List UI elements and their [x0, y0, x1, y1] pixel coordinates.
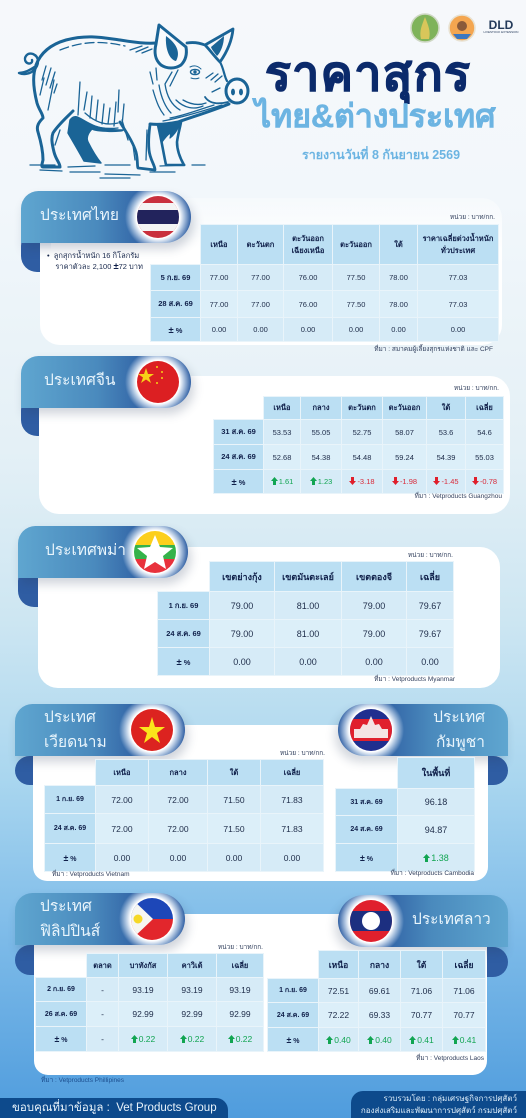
table: Laos prices: กลาง	[370, 960, 389, 970]
logo: DLD	[484, 18, 518, 34]
source: Cambodia: ที่มา : Vetproducts Cambodia	[391, 870, 474, 877]
table: Philippines prices: 26 ส.ค. 69	[45, 1010, 77, 1018]
table: Philippines prices: 92.99	[181, 1009, 203, 1019]
table: Vietnam prices: 72.00	[111, 824, 133, 834]
unit: หน่วย : บาท/กก.	[450, 214, 495, 221]
table: Cambodia prices: 1.38	[431, 852, 449, 862]
unit: หน่วย : บาท/กก.	[408, 552, 453, 559]
table: Thailand prices: 0.00	[391, 325, 406, 334]
table: Myanmar prices: 24 ส.ค. 69	[166, 628, 201, 638]
table: Thailand prices: 77.50	[347, 273, 365, 282]
unit: หน่วย : บาท/กก.	[280, 750, 325, 757]
table: Philippines prices: 0.22	[139, 1034, 155, 1044]
table: China prices: 53.53	[273, 428, 291, 436]
source: Laos: ที่มา : Vetproducts Laos	[416, 1055, 484, 1062]
table: Vietnam prices: 72.00	[111, 794, 133, 804]
table: Myanmar prices: 0.00	[233, 656, 251, 666]
table: China prices: -1.45	[441, 477, 459, 486]
source: ที่มา : Vetproducts Myanmar	[374, 676, 455, 683]
banner: Thailand: ประเทศไทย	[40, 207, 119, 224]
table: China prices: เหนือ	[273, 403, 291, 412]
table: Vietnam prices: 0.00	[114, 852, 130, 862]
table: Thailand prices: เหนือ	[210, 240, 228, 248]
panel: Thailand	[20, 191, 502, 353]
table: Vietnam prices: กลาง	[169, 768, 186, 776]
table: Vietnam prices: 1 ก.ย. 69	[56, 796, 84, 803]
table: China prices: ตะวันตก	[348, 403, 376, 412]
table: Myanmar prices: เขตตองจี	[356, 572, 392, 582]
table: Laos prices: 24 ส.ค. 69	[277, 1012, 309, 1018]
footer: credit: กองส่งเสริมและพัฒนาการปศุสัตว์ กรมปศุสัตว์	[361, 1106, 517, 1115]
table: Laos prices: ใต้	[417, 960, 426, 970]
illustration: pig	[18, 24, 250, 179]
table: Laos prices: 70.77	[453, 1010, 475, 1020]
table: Thailand prices: ทั่วประเทศ	[441, 246, 475, 254]
table: China prices: 52.68	[273, 452, 291, 462]
table: Thailand prices: 77.03	[449, 273, 467, 282]
panel: Philippines and Laos	[15, 893, 508, 1084]
table: Philippines prices: -	[101, 1034, 104, 1044]
unit: หน่วย : บาท/กก.	[218, 944, 263, 951]
table: Philippines prices: -	[101, 984, 104, 994]
table: Thailand prices: 0.00	[212, 325, 226, 334]
table: Thailand prices: 78.00	[389, 300, 408, 308]
table: Myanmar prices: 0.00	[365, 656, 383, 666]
table: Thailand prices: 76.00	[299, 300, 317, 308]
table: China prices: 58.07	[395, 428, 414, 436]
note: piglet price	[47, 250, 143, 271]
logos	[410, 13, 518, 43]
banner: Philippines: ฟิลิปปินส์	[40, 923, 100, 940]
table: Vietnam prices: 71.50	[223, 824, 245, 834]
table: China prices: 52.75	[353, 428, 371, 436]
table: Laos prices: 69.33	[369, 1010, 390, 1020]
banner: Laos	[338, 895, 508, 947]
logo: DLD: DLD	[489, 18, 513, 32]
table: China prices: 59.24	[395, 452, 414, 462]
banner: Cambodia: กัมพูชา	[436, 734, 485, 751]
table: Vietnam prices: 0.00	[226, 852, 242, 862]
table: Thailand prices: 77.03	[449, 300, 467, 308]
table: Thailand prices: ตะวันออก	[340, 240, 372, 248]
table: China prices: 54.38	[312, 452, 330, 462]
table: China prices: เฉลี่ย	[476, 403, 493, 412]
banner: China: ประเทศจีน	[44, 372, 116, 389]
panel: Vietnam and Cambodia	[14, 704, 508, 881]
table: Philippines prices: -	[101, 1009, 104, 1019]
source: ที่มา : Vetproducts Guangzhou	[415, 493, 502, 500]
table: China prices: กลาง	[312, 403, 330, 412]
table: Cambodia prices: 31 ส.ค. 69	[350, 798, 383, 806]
table: Laos prices: 1 ก.ย. 69	[279, 987, 307, 994]
table: China prices: 53.6	[439, 428, 453, 436]
banner: Vietnam: ประเทศ	[44, 709, 96, 726]
table: Philippines prices: 93.19	[229, 984, 251, 994]
table: China prices: ใต้	[442, 403, 450, 412]
table: Thailand prices: เฉียงเหนือ	[292, 246, 324, 254]
table: Laos prices: 69.61	[369, 986, 390, 996]
table: Thailand prices: 77.00	[251, 300, 270, 308]
banner: Philippines	[15, 893, 185, 945]
table: Laos prices: 70.77	[411, 1010, 432, 1020]
table: Laos prices: 72.22	[328, 1010, 349, 1020]
table: China prices: 31 ส.ค. 69	[221, 427, 256, 436]
table: Laos prices	[267, 950, 486, 1052]
table: Thailand prices: 76.00	[299, 273, 317, 282]
banner: Cambodia: ประเทศ	[433, 709, 485, 726]
flag: China	[137, 361, 179, 403]
table: Thailand prices: ± %	[169, 324, 182, 334]
table: Laos prices: 71.06	[411, 986, 432, 996]
source: Philippines: ที่มา : Vetproducts Phillipines	[41, 1077, 124, 1084]
table: China prices	[213, 396, 504, 494]
footer: credit	[351, 1091, 526, 1118]
banner: China	[21, 356, 191, 408]
note: piglet price: • ลูกสุกรน้ำหนัก 16 กิโลกรัม	[47, 251, 139, 260]
source: ที่มา : สมาคมผู้เลี้ยงสุกรแห่งชาติ และ CPF	[374, 346, 493, 353]
table: Myanmar prices: 81.00	[297, 628, 319, 638]
table: Myanmar prices: 81.00	[297, 600, 319, 610]
banner: Philippines: ประเทศ	[40, 898, 92, 915]
table: Thailand prices: ราคาเฉลี่ยต่วงน้ำหนัก	[423, 234, 493, 242]
banner: Cambodia	[338, 704, 508, 756]
table: Thailand prices	[150, 224, 499, 342]
table: Vietnam prices: 0.00	[170, 852, 186, 862]
report date: รายงานวันที่ 8 กันยายน 2569	[302, 148, 460, 162]
table: Philippines prices: 0.22	[236, 1034, 252, 1044]
table: Philippines prices: คาวิเต้	[182, 960, 202, 970]
banner: Vietnam: เวียดนาม	[44, 734, 107, 751]
table: Myanmar prices: เขตมันตะเลย์	[282, 572, 334, 582]
table: Vietnam prices: เฉลี่ย	[284, 768, 300, 776]
table: Laos prices: 72.51	[328, 986, 349, 996]
table: Myanmar prices: 79.00	[363, 600, 385, 610]
table: China prices: 1.23	[318, 477, 332, 486]
table: China prices: 54.6	[477, 428, 492, 436]
source: Vietnam: ที่มา : Vetproducts Vietnam	[52, 871, 130, 878]
table: Vietnam prices: ใต้	[230, 768, 238, 776]
flag: Laos	[350, 900, 392, 942]
flag: Thailand	[137, 196, 179, 238]
table: Philippines prices: เฉลี่ย	[232, 960, 248, 970]
table: Philippines prices: 92.99	[132, 1009, 154, 1019]
table: Cambodia prices: 24 ส.ค. 69	[350, 826, 383, 833]
logo: department seal	[448, 14, 476, 42]
table: Thailand prices: 0.00	[253, 325, 268, 334]
table: Cambodia prices: 96.18	[425, 797, 447, 807]
table: Laos prices: ± %	[286, 1034, 299, 1044]
table: Thailand prices: 0.00	[349, 325, 363, 334]
table: Cambodia prices	[335, 757, 475, 872]
table: China prices: ± %	[232, 476, 245, 486]
table: Thailand prices: 77.00	[210, 300, 228, 308]
footer: credit: รวบรวมโดย : กลุ่มเศรษฐกิจการปศุสัตว์	[384, 1094, 517, 1103]
table: Myanmar prices: 79.00	[231, 600, 253, 610]
table: Thailand prices: 77.50	[347, 300, 365, 308]
table: China prices: 54.39	[437, 452, 455, 462]
subtitle: ไทย&ต่างประเทศ	[255, 98, 495, 134]
banner: Myanmar: ประเทศพม่า	[45, 542, 126, 559]
table: Laos prices: 71.06	[453, 986, 475, 996]
table: Philippines prices	[35, 953, 264, 1052]
table: Myanmar prices: 0.00	[421, 656, 439, 666]
logo: DLD: LIVESTOCK EXTENSION	[484, 30, 518, 34]
flag: Cambodia	[350, 709, 392, 751]
table: Thailand prices: ใต้	[394, 240, 403, 248]
table: Cambodia prices: ในพื้นที่	[422, 768, 450, 778]
flag: Vietnam	[131, 709, 173, 751]
table: China prices: -0.78	[480, 477, 497, 486]
table: Vietnam prices: เหนือ	[113, 768, 131, 776]
table: Myanmar prices: 79.67	[419, 628, 441, 638]
table: China prices: -3.18	[357, 477, 375, 486]
table: China prices: ตะวันออก	[389, 403, 420, 412]
table: Myanmar prices: เฉลี่ย	[420, 572, 440, 582]
table: Myanmar prices: 79.00	[231, 628, 253, 638]
table: Myanmar prices: ± %	[177, 656, 190, 666]
table: Vietnam prices	[44, 759, 324, 872]
table: Thailand prices: 5 ก.ย. 69	[161, 272, 190, 282]
table: Laos prices: 0.41	[460, 1034, 476, 1044]
table: China prices: 54.48	[353, 452, 371, 462]
table: Philippines prices: ตลาด	[93, 960, 112, 970]
table: Myanmar prices	[157, 561, 454, 676]
table: Laos prices: 0.40	[375, 1034, 392, 1044]
table: Thailand prices: ตะวันตก	[247, 240, 274, 248]
table: Vietnam prices: 71.50	[223, 794, 245, 804]
table: China prices: 1.61	[279, 477, 293, 486]
logo: ministry seal	[410, 13, 440, 43]
table: Thailand prices: 77.00	[210, 273, 228, 282]
table: China prices: 55.05	[312, 428, 330, 436]
table: Thailand prices: 0.00	[451, 325, 465, 334]
table: Vietnam prices: 71.83	[281, 794, 303, 804]
banner: Thailand	[21, 191, 191, 243]
panel: Myanmar	[17, 526, 500, 688]
table: China prices: -1.98	[400, 477, 417, 486]
table: Thailand prices: 77.00	[251, 273, 270, 282]
table: Philippines prices: 0.22	[188, 1034, 204, 1044]
table: Cambodia prices: 94.87	[425, 824, 447, 834]
title: ราคาสุกร	[265, 48, 471, 101]
table: Myanmar prices: 0.00	[299, 656, 317, 666]
table: China prices: 24 ส.ค. 69	[221, 452, 256, 461]
table: Philippines prices: 92.99	[229, 1009, 251, 1019]
table: Thailand prices: 28 ส.ค. 69	[158, 299, 193, 308]
table: Laos prices: เหนือ	[329, 960, 348, 970]
table: Laos prices: 0.41	[417, 1034, 434, 1044]
table: Myanmar prices: เขตย่างกุ้ง	[222, 572, 262, 582]
footer: thanks	[0, 1098, 228, 1118]
flag: Myanmar	[134, 531, 176, 573]
table: Vietnam prices: 71.83	[281, 824, 303, 834]
table: Philippines prices: 93.19	[132, 984, 154, 994]
table: Vietnam prices: 72.00	[167, 794, 189, 804]
table: Vietnam prices: 0.00	[284, 852, 300, 862]
table: Thailand prices: ตะวันออก	[292, 234, 324, 242]
table: Myanmar prices: 79.00	[363, 628, 385, 638]
table: Laos prices: 0.40	[334, 1034, 351, 1044]
table: Philippines prices: 93.19	[181, 984, 203, 994]
table: Vietnam prices: 72.00	[167, 824, 189, 834]
panel: China	[20, 356, 510, 514]
table: Philippines prices: 2 ก.ย. 69	[47, 986, 75, 993]
banner: Vietnam	[15, 704, 185, 756]
table: Cambodia prices: ± %	[360, 852, 373, 862]
banner: Myanmar	[18, 526, 188, 578]
footer: thanks: ขอบคุณที่มาข้อมูล : Vet Products Group	[12, 1102, 217, 1114]
table: Vietnam prices: ± %	[64, 852, 76, 862]
table: Philippines prices: ± %	[54, 1034, 67, 1044]
note: piglet price: ราคาตัวละ 2,100 ±72 บาท	[55, 261, 143, 271]
banner: Laos: ประเทศลาว	[412, 911, 491, 928]
table: Myanmar prices: 1 ก.ย. 69	[169, 600, 198, 610]
table: Thailand prices: 78.00	[389, 273, 408, 282]
table: Thailand prices: 0.00	[301, 325, 315, 334]
unit: หน่วย : บาท/กก.	[454, 385, 499, 392]
table: China prices: 55.03	[475, 452, 494, 462]
table: Vietnam prices: 24 ส.ค. 69	[54, 825, 86, 832]
table: Myanmar prices: 79.67	[419, 600, 441, 610]
table: Laos prices: เฉลี่ย	[455, 960, 473, 970]
flag: Philippines	[131, 898, 173, 940]
table: Philippines prices: บาทังกัส	[130, 960, 156, 970]
